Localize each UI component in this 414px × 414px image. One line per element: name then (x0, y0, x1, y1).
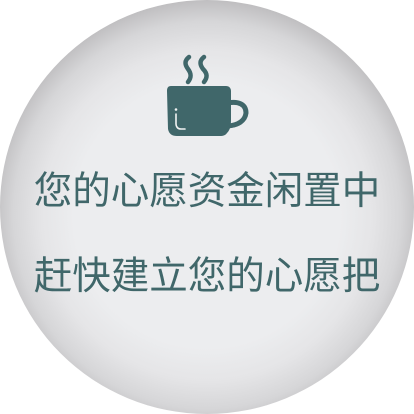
icon: coffee cup with steam (167, 54, 248, 136)
text: first line: 您的心愿资金闲置中 (34, 170, 380, 213)
text: second line: 赶快建立您的心愿把 (34, 255, 380, 298)
